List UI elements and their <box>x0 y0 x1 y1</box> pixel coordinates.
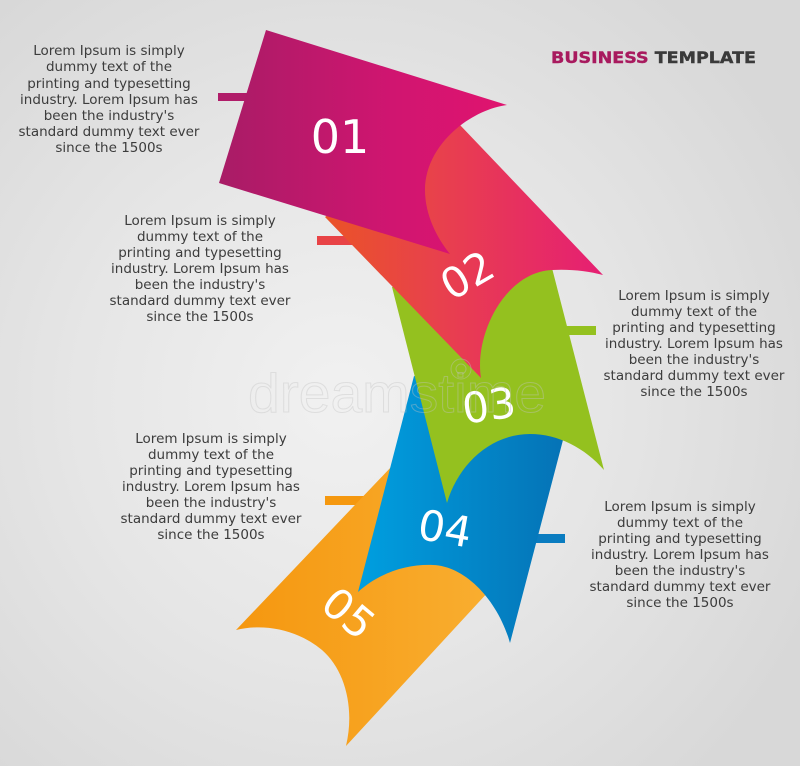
text block 2: industry. Lorem Ipsum has <box>111 261 289 277</box>
text block 1: industry. Lorem Ipsum has <box>20 92 198 108</box>
text block 5: been the industry's <box>146 495 276 511</box>
text block 1: been the industry's <box>44 108 174 124</box>
number 04: 04 <box>414 500 475 557</box>
shape 4: blue ribbon <box>358 376 563 643</box>
text block 4: printing and typesetting <box>598 531 762 547</box>
text block 4: Lorem Ipsum is simply <box>604 499 756 515</box>
connector tab 5 <box>325 496 365 505</box>
number 03: 03 <box>459 378 519 434</box>
text block 3: dummy text of the <box>631 304 757 320</box>
text block 2: Lorem Ipsum is simply <box>124 213 276 229</box>
text block 2: dummy text of the <box>137 229 263 245</box>
text block 4: been the industry's <box>615 563 745 579</box>
shape 5: orange ribbon <box>236 466 490 746</box>
text block 1: standard dummy text ever <box>19 124 200 140</box>
connector tab 3 <box>560 326 596 335</box>
text block 3: since the 1500s <box>640 384 748 400</box>
text block 1: since the 1500s <box>55 140 163 156</box>
text block 1: Lorem Ipsum is simply <box>33 43 185 59</box>
text block 5: dummy text of the <box>148 447 274 463</box>
text block 1: dummy text of the <box>46 59 172 75</box>
number 02: 02 <box>432 241 503 310</box>
text block 2: standard dummy text ever <box>110 293 291 309</box>
text block 3: standard dummy text ever <box>604 368 785 384</box>
title: BUSINESS TEMPLATE <box>551 48 756 67</box>
text block 2: since the 1500s <box>146 309 254 325</box>
watermark: dreamstime <box>248 362 546 424</box>
text block 4: dummy text of the <box>617 515 743 531</box>
shape 1: magenta ribbon <box>219 30 507 254</box>
text block 5: standard dummy text ever <box>121 511 302 527</box>
number 01: 01 <box>311 110 369 164</box>
text block 5: industry. Lorem Ipsum has <box>122 479 300 495</box>
text block 4: industry. Lorem Ipsum has <box>591 547 769 563</box>
text block 2: been the industry's <box>135 277 265 293</box>
text block 1: printing and typesetting <box>27 76 191 92</box>
text block 5: since the 1500s <box>157 527 265 543</box>
shape 3: green ribbon <box>392 268 604 503</box>
connector tab 2 <box>317 236 357 245</box>
text block 4: standard dummy text ever <box>590 579 771 595</box>
text block 5: printing and typesetting <box>129 463 293 479</box>
text block 4: since the 1500s <box>626 595 734 611</box>
text block 2: printing and typesetting <box>118 245 282 261</box>
text block 3: industry. Lorem Ipsum has <box>605 336 783 352</box>
shape 2: red ribbon <box>325 125 603 378</box>
text block 3: been the industry's <box>629 352 759 368</box>
text block 3: printing and typesetting <box>612 320 776 336</box>
connector tab 1 <box>218 93 250 101</box>
text block 3: Lorem Ipsum is simply <box>618 288 770 304</box>
text block 5: Lorem Ipsum is simply <box>135 431 287 447</box>
connector tab 4 <box>530 534 565 543</box>
number 05: 05 <box>312 577 385 649</box>
